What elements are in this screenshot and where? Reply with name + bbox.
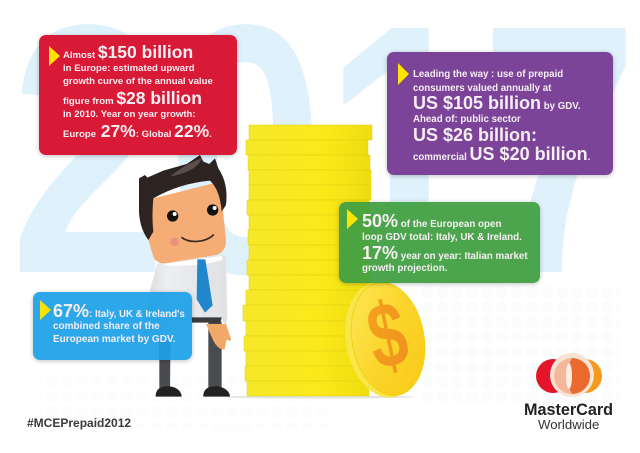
text: US $105 billion by GDV: US $105 billion by GDV. <box>413 93 581 113</box>
text: Ahead of public sector: Ahead of: public sector <box>413 114 521 125</box>
text: 50% of the European open: 50% of the European open <box>362 211 501 231</box>
text: growth projection: growth projection. <box>362 263 447 274</box>
hand <box>206 324 231 349</box>
text: Worldwide: Worldwide <box>538 417 599 432</box>
icon: gold dollar coin <box>345 280 426 398</box>
text: loop GDV total: loop GDV total: Italy, UK & Ireland. <box>362 232 522 243</box>
text: 67% Italy, UK & Ireland's: 67%: Italy, UK & Ireland's <box>53 301 185 321</box>
text: growth curve: growth curve of the annual value <box>63 76 213 87</box>
text: Europe 27% Global 22%: Europe 27%: Global 22%. <box>63 121 212 141</box>
panel: blue market share <box>33 292 192 360</box>
text: European market by GDV: European market by GDV. <box>53 334 175 345</box>
legs <box>159 322 222 390</box>
text: commercial US $20 billion: commercial US $20 billion. <box>413 144 590 164</box>
hair <box>139 155 227 240</box>
icon: yellow arrow <box>347 209 358 229</box>
text: consumers valued: consumers valued annually at <box>413 83 551 94</box>
hashtag: #MCEPrepaid2012 <box>27 416 131 430</box>
icon: interlocking circles <box>536 353 602 397</box>
belt <box>192 317 222 323</box>
eyes <box>167 210 178 222</box>
text: in Europe: in Europe: estimated upward <box>63 63 195 74</box>
icon: yellow arrow <box>40 300 51 320</box>
text: figure from $28 billion: figure from $28 billion <box>63 88 202 108</box>
panel: green European open loop <box>339 202 540 283</box>
icon: gold dollar coin: $ <box>359 280 416 389</box>
text: 17% year on year: 17% year on year: Italian market <box>362 243 528 263</box>
icon: yellow arrow <box>398 63 409 85</box>
text: MasterCard: MasterCard <box>524 401 613 419</box>
panel: purple consumers value <box>387 52 613 175</box>
text: combined share: combined share of the <box>53 321 160 332</box>
shirt <box>143 255 227 343</box>
text: Leading the way: Leading the way : use of prepaid <box>413 69 563 80</box>
icon: shoes <box>156 386 230 397</box>
text: US $26 billion: US $26 billion: <box>413 125 537 145</box>
face <box>148 182 226 263</box>
text: Almost $150 billion: Almost $150 billion <box>63 42 193 62</box>
panel: red Europe growth <box>39 35 237 155</box>
logo: MasterCard Worldwide <box>524 353 613 432</box>
icon: blue tie <box>197 259 213 313</box>
icon: yellow arrow <box>49 46 60 66</box>
mouth <box>182 235 213 241</box>
text: in 2010: in 2010. Year on year growth: <box>63 109 196 120</box>
cheek <box>170 237 179 246</box>
